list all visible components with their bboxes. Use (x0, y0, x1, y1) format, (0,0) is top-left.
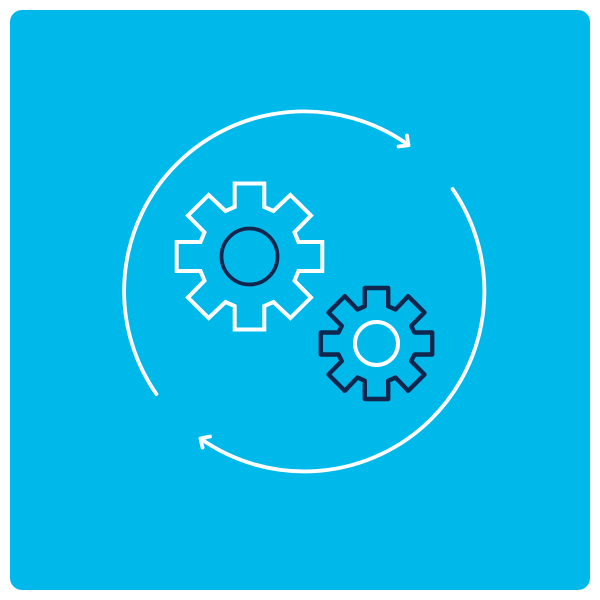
cycle arrow: lower arc (200, 189, 484, 471)
gear hub: white circle (355, 322, 398, 365)
icon: small navy gear (321, 288, 432, 399)
cycle arrow: upper arc (124, 111, 408, 394)
gear hub: navy circle (222, 228, 278, 284)
icon: large white gear (177, 184, 322, 330)
